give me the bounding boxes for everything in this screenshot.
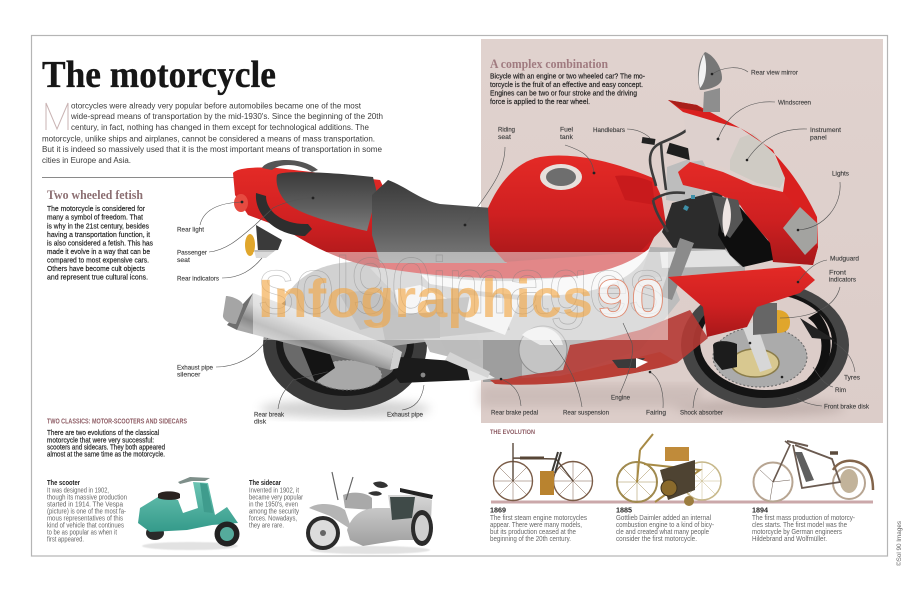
1894 text: Hildebrand and Wolfmüller. bbox=[752, 534, 827, 543]
under seat red bodywork bbox=[370, 225, 660, 278]
label: shock absorber bbox=[680, 342, 751, 416]
label: rear break disk bbox=[254, 371, 328, 426]
sidecar text: among the security bbox=[249, 506, 299, 516]
sidecar text: Invented in 1902, it bbox=[249, 486, 299, 494]
heading: the evolution: THE EVOLUTION bbox=[490, 429, 535, 436]
callout labels top bbox=[464, 126, 650, 226]
rear view mirror bbox=[698, 52, 722, 112]
fetish body text: and represent true cultural icons. bbox=[47, 273, 148, 282]
rear grab rail bbox=[262, 160, 318, 172]
label: rear break disk: Rear break bbox=[254, 412, 285, 418]
two classics intro: scooters and sidecars. They both appeared bbox=[47, 442, 165, 452]
panel: a complex combination background bbox=[481, 39, 883, 423]
callout labels left bbox=[177, 197, 424, 426]
fetish body text: The motorcycle is considered for bbox=[47, 204, 145, 213]
label: rear break disk: disk bbox=[254, 418, 267, 426]
label: rear light bbox=[177, 201, 243, 234]
label: rim: Rim bbox=[835, 387, 846, 394]
label: rear indicators bbox=[177, 258, 262, 282]
black hollow bbox=[718, 200, 773, 267]
riding seat bbox=[372, 180, 507, 263]
label: fairing bbox=[646, 371, 666, 416]
1885 text: Gottlieb Daimler added an internal bbox=[616, 513, 711, 522]
1885 text: combustion engine to a kind of bicy- bbox=[616, 520, 715, 529]
main motorcycle illustration bbox=[223, 52, 849, 418]
timeline bar bbox=[491, 500, 873, 504]
label: rear suspension bbox=[550, 340, 609, 416]
label: fuel tank: tank bbox=[560, 134, 573, 141]
label: windscreen bbox=[717, 100, 811, 140]
1894 text: 1894 bbox=[752, 506, 768, 514]
1869 text: 1869 bbox=[490, 506, 506, 514]
label: tyres: Tyres bbox=[844, 374, 861, 382]
1869 text: but its production ceased at the bbox=[490, 527, 576, 536]
fetish body text: is also considered a fetish. This has bbox=[47, 238, 153, 247]
callout labels right bbox=[711, 68, 870, 411]
label: passenger seat: seat bbox=[177, 257, 190, 264]
label: rim bbox=[813, 367, 846, 394]
label: passenger seat bbox=[177, 197, 314, 264]
sidecar text: in the 1950's, even bbox=[249, 500, 298, 508]
scooter text: though its massive production bbox=[47, 492, 127, 502]
two classics intro bbox=[47, 428, 165, 458]
scooter text: started in 1914. The Vespa bbox=[47, 500, 123, 508]
heading: a complex combination: A complex combination bbox=[490, 57, 608, 71]
label: instrument panel: Instrument bbox=[810, 127, 841, 134]
tail fairing bbox=[233, 168, 392, 268]
1885 text bbox=[616, 506, 715, 543]
label: rear view mirror bbox=[711, 68, 799, 76]
exhaust silencer bbox=[223, 293, 402, 370]
complex combination body: Engines can be two or four stroke and the driving bbox=[490, 88, 637, 98]
label: fairing: Fairing bbox=[646, 410, 666, 416]
label: front brake disk: Front brake disk bbox=[824, 404, 870, 410]
white frame band bbox=[420, 248, 650, 295]
scooter text: first appeared. bbox=[47, 534, 84, 544]
fetish body text: Others have become cult objects bbox=[47, 264, 145, 273]
ground shadow bbox=[260, 385, 845, 418]
label: fuel tank: Fuel bbox=[560, 126, 573, 134]
complex combination body bbox=[490, 72, 645, 106]
handlebars bbox=[642, 117, 695, 232]
fetish body text: compared to most expensive cars. bbox=[47, 256, 149, 265]
label: engine: Engine bbox=[611, 394, 630, 402]
side mirror reflection bbox=[712, 195, 743, 238]
copyright credit: ©Sol 90 Images bbox=[896, 521, 903, 566]
fetish body text: is why in the 21st century, besides bbox=[47, 221, 149, 230]
label: riding seat: seat bbox=[498, 134, 511, 141]
callout labels bottom bbox=[491, 323, 751, 416]
heading: two classics: TWO CLASSICS: MOTOR-SCOOTERS AND SIDECARS bbox=[47, 418, 187, 426]
bike 1894 bbox=[754, 441, 873, 502]
rear wheel bbox=[263, 280, 427, 410]
lower fairing bbox=[490, 310, 708, 385]
label: passenger seat: Passenger bbox=[177, 250, 208, 256]
label: riding seat bbox=[464, 126, 515, 226]
section: two wheeled fetish bbox=[47, 188, 153, 282]
bike 1885 bbox=[617, 434, 721, 506]
two classics intro: motorcycle that were very successful: bbox=[47, 436, 154, 444]
label: exhaust pipe silencer: silencer bbox=[177, 372, 201, 378]
label: riding seat: Riding bbox=[498, 126, 515, 134]
passenger handle bbox=[256, 193, 312, 236]
bike 1869 bbox=[493, 443, 593, 501]
swing arm and foot peg bbox=[392, 352, 495, 383]
label: rear light: Rear light bbox=[177, 226, 204, 234]
front wheel bbox=[681, 282, 849, 408]
fuel tank bbox=[488, 156, 666, 262]
label: handlebars: Handlebars bbox=[593, 127, 626, 134]
label: rear suspension: Rear suspension bbox=[563, 410, 609, 416]
intro text block: cities in Europe and Asia. bbox=[42, 156, 131, 165]
1894 text: The first mass production of motorcy- bbox=[752, 513, 856, 522]
drop cap M bbox=[46, 103, 68, 130]
label: tyres bbox=[834, 342, 861, 382]
1894 text: motorcycle by German engineers bbox=[752, 527, 842, 536]
label: exhaust pipe: Exhaust pipe bbox=[387, 412, 423, 418]
label: mudguard bbox=[797, 256, 859, 283]
scooter text: to be as popular as when it bbox=[47, 528, 117, 536]
title: The motorcycle bbox=[42, 54, 276, 96]
label: exhaust pipe silencer bbox=[177, 338, 268, 378]
rear indicator and tail light bbox=[234, 194, 282, 258]
fetish body text: made it evolve in a way that can be bbox=[47, 247, 150, 256]
section: the evolution bbox=[490, 429, 873, 543]
fetish body text: many a symbol of freedom. That bbox=[47, 213, 144, 222]
fetish body text: having a transportation function, it bbox=[47, 230, 151, 239]
watermark overlay: sol90images bbox=[258, 241, 665, 330]
intro text block: motorcycle, unlike ships and airplanes, cannot be considered a means of mass transportation. bbox=[42, 134, 375, 144]
sidecar text bbox=[249, 478, 303, 530]
headlights bbox=[783, 207, 817, 255]
label: instrument panel: panel bbox=[810, 134, 827, 142]
complex combination body: force is applied to the rear wheel. bbox=[490, 97, 590, 106]
label: mudguard: Mudguard bbox=[830, 256, 859, 262]
label: lights bbox=[797, 170, 850, 231]
1885 text: cle and created what many people bbox=[616, 527, 709, 536]
1894 text: cles starts. The first model was the bbox=[752, 520, 847, 529]
section: two classics bbox=[47, 418, 433, 554]
label: shock absorber: Shock absorber bbox=[680, 410, 724, 416]
fetish body text bbox=[47, 204, 153, 282]
watermark overlay: 90 bbox=[597, 269, 665, 329]
label: lights: Lights bbox=[832, 170, 850, 178]
complex combination body: torcycle is the fruit of an effective and easy concept. bbox=[490, 80, 643, 89]
sidecar text: forces. Nowadays, bbox=[249, 514, 297, 522]
intro text block: wide-spread means of transportation by the mid-1930's. Since the beginning of the 20th bbox=[70, 112, 383, 121]
scooter text: It was designed in 1902, bbox=[47, 486, 109, 494]
scooter text bbox=[47, 478, 127, 544]
front lower fairing bbox=[668, 266, 815, 337]
scooter text: The scooter bbox=[47, 478, 80, 487]
label: front indicators bbox=[780, 270, 857, 318]
label: rear view mirror: Rear view mirror bbox=[751, 70, 799, 76]
intro text block: otorcycles were already very popular before automobiles became one of the most bbox=[71, 102, 362, 110]
intro text block: century, in fact, nothing has changed in them except for technological additions. The bbox=[71, 123, 370, 132]
scooter text: mous representatives of this bbox=[47, 514, 123, 522]
label: rear brake pedal: Rear brake pedal bbox=[491, 410, 538, 416]
1869 text: beginning of the 20th century. bbox=[490, 534, 571, 543]
complex combination body: Bicycle with an engine or two wheeled car? The mo- bbox=[490, 72, 645, 80]
front fork and shock absorber bbox=[742, 303, 790, 372]
label: rear brake pedal bbox=[491, 378, 538, 416]
intro text block bbox=[42, 102, 383, 165]
front fairing bbox=[668, 100, 818, 265]
label: windscreen: Windscreen bbox=[778, 100, 811, 106]
label: engine bbox=[611, 323, 632, 402]
label: fuel tank bbox=[560, 126, 595, 174]
1869 text: appear. There were many models, bbox=[490, 520, 582, 529]
front frame mechanics bbox=[640, 155, 745, 300]
watermark overlay: Infographics bbox=[258, 269, 593, 329]
1885 text: consider the first motorcycle. bbox=[616, 534, 697, 543]
label: exhaust pipe bbox=[387, 385, 424, 418]
label: front brake disk bbox=[781, 376, 870, 410]
scooter illustration bbox=[138, 477, 240, 550]
1885 text: 1885 bbox=[616, 506, 632, 514]
label: front indicators: indicators bbox=[829, 276, 857, 284]
label: instrument panel bbox=[746, 127, 841, 161]
sidecar illustration bbox=[306, 472, 433, 554]
label: handlebars bbox=[593, 127, 650, 138]
label: exhaust pipe silencer: Exhaust pipe bbox=[177, 364, 213, 372]
1894 text bbox=[752, 506, 856, 543]
instrument panel bbox=[730, 133, 785, 188]
engine and frame bbox=[285, 155, 745, 382]
sidecar text: The sidecar bbox=[249, 478, 281, 487]
1869 text: The first steam engine motorcycles bbox=[490, 513, 587, 522]
two classics intro: almost at the same time as the motorcycle. bbox=[47, 450, 165, 458]
intro text block: But it is indeed so massively used that it is the most important means of transportation in some bbox=[42, 145, 383, 154]
label: front indicators: Front bbox=[829, 270, 846, 276]
scooter text: (picture) is one of the most fa- bbox=[47, 506, 126, 516]
1869 text bbox=[490, 506, 587, 543]
sidecar text: became very popular bbox=[249, 492, 303, 502]
section: a complex combination text bbox=[490, 57, 645, 106]
windscreen bbox=[683, 112, 785, 183]
passenger seat bbox=[277, 172, 377, 231]
sidecar text: they are rare. bbox=[249, 520, 284, 530]
label: rear indicators: Rear indicators bbox=[177, 276, 220, 282]
two classics intro: There are two evolutions of the classical bbox=[47, 428, 159, 437]
heading: two wheeled fetish: Two wheeled fetish bbox=[47, 188, 143, 202]
scooter text: kind of vehicle that continues bbox=[47, 520, 124, 530]
